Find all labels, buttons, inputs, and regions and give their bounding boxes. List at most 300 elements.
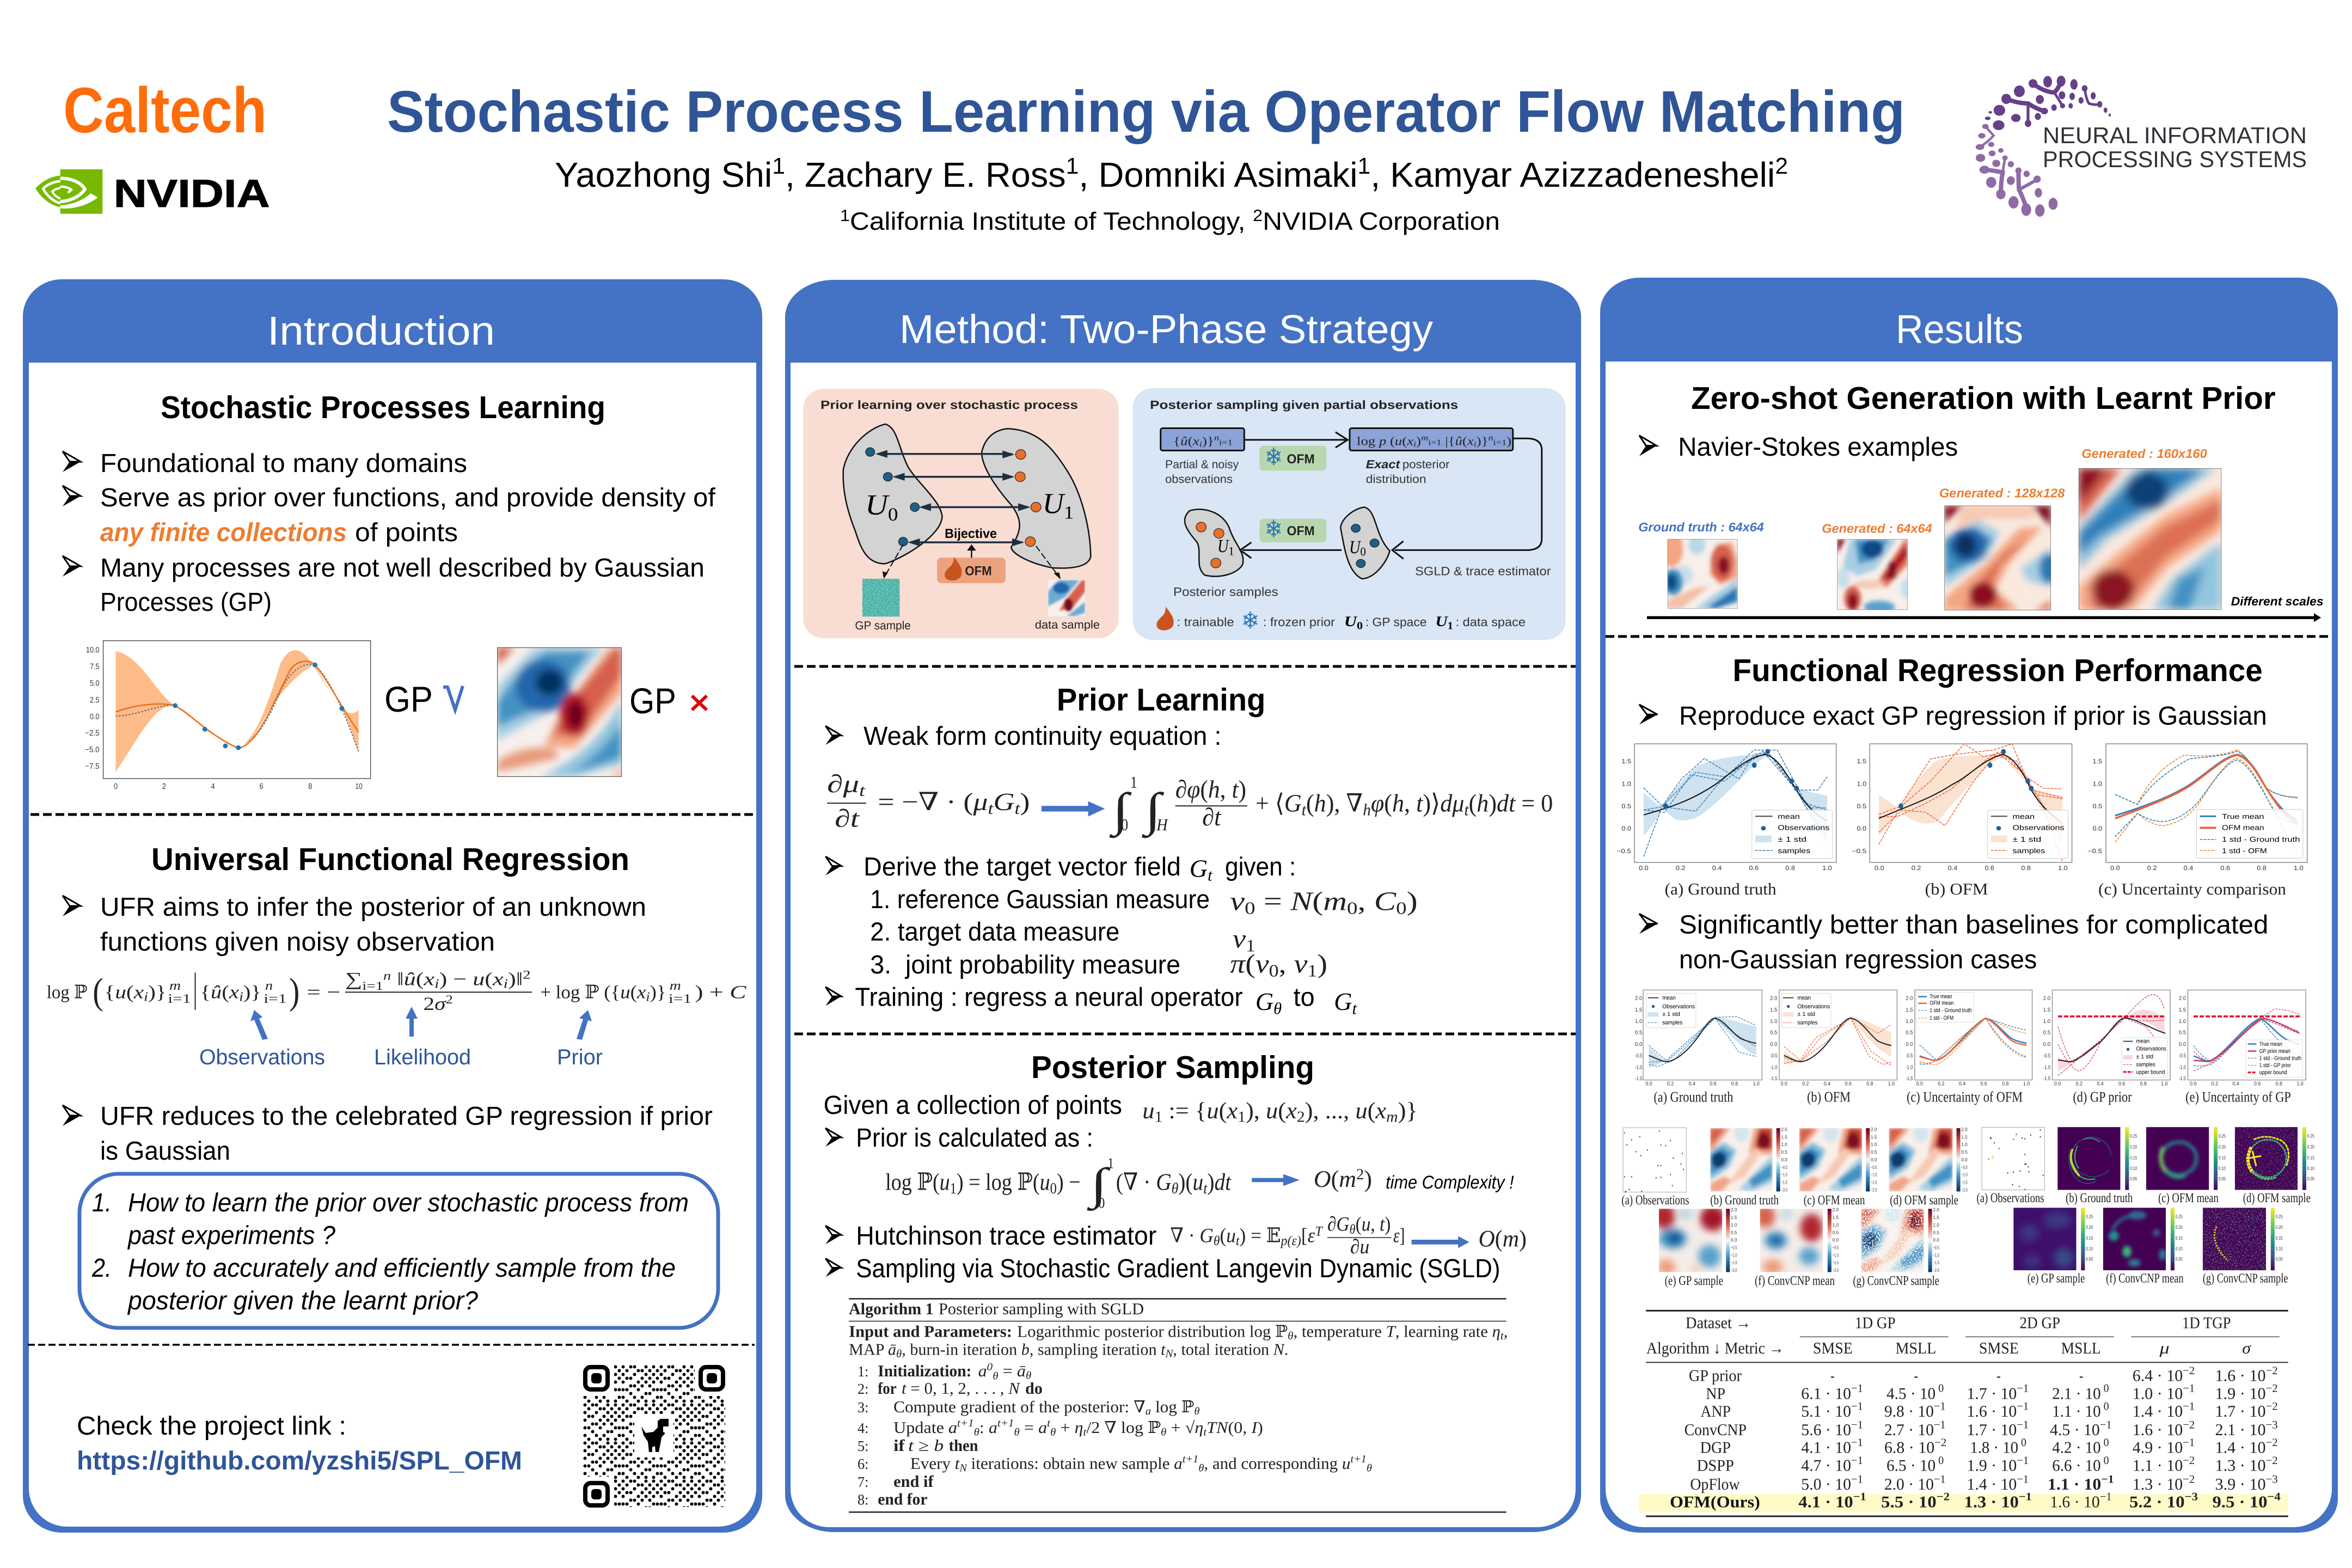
bullet: prior calculation xyxy=(825,1123,1093,1152)
heatmap: (b) ground truth RdBu xyxy=(1710,1124,1773,1191)
tick labels: five-panel plots: -1.5 xyxy=(2179,1075,2186,1081)
table: regression performance: 4.9 · 10 xyxy=(2133,1438,2258,1456)
bullet: training: t xyxy=(1352,999,1357,1018)
algorithm box: , burn-in iteration xyxy=(902,1340,1021,1358)
captions: viridis top row: (b) Ground truth xyxy=(2066,1190,2133,1205)
chart: (c) uncertainty comparison: 0.6 xyxy=(2220,865,2230,871)
equation: UFR posterior: 2 xyxy=(446,993,453,1006)
equation: continuity: h), ∇ xyxy=(1314,789,1396,817)
bullet: Hutchinson: p(ε) xyxy=(1280,1233,1301,1248)
algorithm box: Every t xyxy=(910,1454,977,1472)
figure: posterior sampling given partial observations: 0 xyxy=(1361,545,1366,559)
chart: (b) OFM GP regression: 0.8 xyxy=(2021,865,2031,871)
table: regression performance: 1.8 · 10 xyxy=(1970,1438,2095,1456)
list: measures: 3. joint probability measure xyxy=(870,950,1180,979)
bullet: UFR aim xyxy=(63,893,646,957)
colorbars: RdBu top row: 1.0 xyxy=(1871,1142,1877,1147)
chart: (b) OFM TGP: Observations xyxy=(1797,1003,1830,1009)
tick labels: five-panel plots: 2.0 xyxy=(1635,995,1642,1001)
algorithm box: θ xyxy=(1026,1369,1031,1381)
colorbars: RdBu top row: −1.0 xyxy=(1781,1172,1787,1178)
text: collection of points: ), ..., xyxy=(1305,1098,1355,1123)
table: regression performance: 9.5 · 10 xyxy=(2213,1493,2338,1511)
section: non-Gaussian regression figures: 1.0 xyxy=(1961,1142,1968,1147)
tick labels: five-panel plots: 1.5 xyxy=(2043,1007,2050,1013)
authors: Yaozhong Shi xyxy=(555,155,769,194)
tick labels: five-panel plots: -0.5 xyxy=(2043,1052,2050,1058)
table: regression performance: −3 xyxy=(2266,1473,2278,1485)
equation: continuity: ∫ xyxy=(1142,783,1165,838)
figure: posterior sampling given partial observations xyxy=(1133,388,1566,640)
table: regression performance: 3.9 · 10 xyxy=(2215,1475,2341,1493)
chart: (a) ground truth GP regression: 0.8 xyxy=(1785,865,1795,871)
list: measures: 1. reference Gaussian measure xyxy=(870,885,1210,914)
equation: UFR posterior: )} xyxy=(650,982,666,1002)
table: regression performance: OFM(Ours) xyxy=(1670,1493,1760,1511)
table: regression performance: −3 xyxy=(2185,1491,2198,1503)
table: regression performance: −1 xyxy=(2100,1418,2112,1431)
bullet: training: G xyxy=(1334,988,1367,1015)
chart: (d) GP prior: mean xyxy=(2136,1038,2149,1044)
colorbars: RdBu bottom row: 0.0 xyxy=(1731,1237,1737,1243)
section: non-Gaussian regression figures: 2.0 xyxy=(1933,1207,1939,1212)
list: measures: π(ν xyxy=(1230,948,1277,978)
colorbars: viridis top row: 0.25 xyxy=(2130,1134,2137,1139)
text: collection of points: u(x xyxy=(1206,1098,1245,1123)
callout: research questions: posterior given the learnt prior? xyxy=(127,1287,478,1315)
text: collection of points: 1 xyxy=(1238,1108,1246,1125)
table: regression performance: −1 xyxy=(2183,1436,2195,1449)
chart: (c) uncertainty of OFM: 1 std - OFM xyxy=(1930,1014,1953,1021)
tick labels: five-panel plots: -1.0 xyxy=(1906,1064,1913,1070)
chart: (a) ground truth GP regression: 0.0 xyxy=(1621,825,1631,832)
tick labels: five-panel plots: 0.8 xyxy=(1731,1081,1738,1087)
chart: (a) ground truth GP regression: 0.0 xyxy=(1639,865,1649,871)
equation: log prior: ) xyxy=(1364,1166,1372,1192)
colorbars: RdBu bottom row: 1.0 xyxy=(1731,1222,1737,1228)
table: regression performance: 6.1 · 10 xyxy=(1801,1385,1926,1402)
equation: UFR posterior: ({u(x xyxy=(604,982,646,1002)
bullet: Hutchinson: ε xyxy=(1308,1224,1315,1247)
table: regression performance: 1.9 · 10 xyxy=(1967,1456,2092,1474)
captions: five-panel plots xyxy=(1653,1089,2291,1105)
algorithm box: 8: xyxy=(857,1491,868,1508)
chart: GP regression example: 4 xyxy=(211,782,215,791)
arrow: likelihood xyxy=(406,1007,418,1037)
equation: continuity: ( xyxy=(1469,789,1477,817)
chart: GP regression example: 0 xyxy=(114,782,118,791)
chart: (c) uncertainty of OFM: OFM mean xyxy=(1930,1000,1953,1006)
colorbars: RdBu bottom row: −0.5 xyxy=(1833,1245,1839,1251)
table: regression performance: −1 xyxy=(2101,1473,2114,1485)
bullet: Hutchinson: u xyxy=(1226,1224,1236,1247)
table: regression performance: 1.6 · 10 xyxy=(2215,1367,2341,1385)
figure: posterior sampling given partial observations: SGLD & trace estimator xyxy=(1415,564,1551,578)
tick labels: five-panel plots: -1.5 xyxy=(1635,1075,1642,1081)
colorbars: RdBu top row: 2.0 xyxy=(1781,1126,1787,1132)
algorithm box: a xyxy=(978,1362,987,1380)
colorbars: RdBu top row: 1.5 xyxy=(1871,1134,1877,1140)
tick labels: five-panel plots: 2.0 xyxy=(1770,995,1777,1001)
tick labels: five-panel plots: 1.0 xyxy=(1753,1081,1760,1087)
algorithm box: 7: xyxy=(857,1473,868,1490)
list: measures: ν xyxy=(1294,948,1308,978)
logo: NeurIPS xyxy=(1976,76,2307,217)
equation: UFR posterior: ‖ xyxy=(391,969,404,989)
table: regression performance: 1.4 · 10 xyxy=(1967,1475,2092,1493)
figure: posterior sampling given partial observations: n xyxy=(1489,433,1493,442)
figure: posterior sampling given partial observations: |{û(x xyxy=(1448,434,1479,448)
colorbars: viridis bottom row: 0.25 xyxy=(2176,1214,2183,1219)
equation: UFR posterior: )} xyxy=(243,982,261,1002)
chart: (e) uncertainty of GP: GP prior mean xyxy=(2259,1048,2290,1054)
section: non-Gaussian regression figures: 1.0 xyxy=(1933,1222,1939,1228)
heatmap: generated 160x160 xyxy=(2079,468,2221,610)
bullet: Hutchinson: ( xyxy=(1356,1212,1362,1235)
algorithm box: a xyxy=(1174,1454,1183,1472)
section: non-Gaussian regression figures: −1.5 xyxy=(1961,1179,1968,1185)
section: Functional Regression Performance: (b) OFM xyxy=(1925,880,1988,898)
table: regression performance: 1.0 · 10 xyxy=(2133,1385,2258,1402)
algorithm box: 2: xyxy=(857,1380,868,1397)
captions: RdBu bottom row: (e) GP sample xyxy=(1665,1273,1723,1288)
captions: five-panel plots: (b) OFM xyxy=(1807,1089,1851,1105)
section: non-Gaussian regression figures: 0.15 xyxy=(2276,1235,2283,1241)
figure: posterior sampling given partial observations: n xyxy=(1214,433,1219,442)
chart: (a) ground truth GP regression: 0.4 xyxy=(1712,865,1722,871)
list: measures: 0 xyxy=(1396,899,1407,918)
algorithm box: θ xyxy=(1161,1426,1167,1438)
captions: five-panel plots: (d) GP prior xyxy=(2073,1089,2132,1105)
table: regression performance: ConvCNP xyxy=(1685,1421,1747,1439)
bullet: Hutchinson: ) = 𝔼 xyxy=(1240,1224,1281,1247)
list: measures: ) xyxy=(1317,948,1327,978)
colorbars: viridis bottom row: 0.20 xyxy=(2176,1224,2183,1230)
table: regression performance: OpFlow xyxy=(1690,1475,1740,1493)
algorithm box: , xyxy=(1504,1322,1508,1340)
chart: (e) uncertainty of GP: 1 std - GP prior xyxy=(2259,1062,2291,1068)
arrow: implies xyxy=(1042,801,1105,817)
bullet: Hutchinson: u, t) xyxy=(1362,1212,1396,1235)
chart: (a) ground truth TGP: ± 1 std xyxy=(1662,1010,1680,1018)
list: measures: ) xyxy=(1407,886,1418,916)
captions: five-panel plots: (a) Ground truth xyxy=(1653,1089,1733,1105)
figure: posterior sampling given partial observations: ) xyxy=(1416,434,1421,448)
tick labels: five-panel plots: 0.4 xyxy=(2097,1081,2104,1087)
colorbars: RdBu bottom row: −2.0 xyxy=(1731,1267,1737,1273)
equation: UFR posterior: û(x xyxy=(404,969,432,989)
section: non-Gaussian regression figures: 0.20 xyxy=(2276,1224,2283,1230)
captions: viridis top row: (c) OFM mean xyxy=(2158,1190,2219,1205)
equation: UFR posterior: i xyxy=(646,990,650,1004)
chart: (b) OFM GP regression: mean xyxy=(2012,812,2035,820)
algorithm box: + √ xyxy=(1167,1418,1195,1437)
colorbars: RdBu bottom row: 2.0 xyxy=(1731,1207,1737,1212)
table: regression performance: −3 xyxy=(2266,1418,2278,1431)
table: regression performance: −2 xyxy=(2183,1473,2195,1485)
table: regression performance: 0 xyxy=(1935,1454,1944,1467)
section: non-Gaussian regression figures: 0.5 xyxy=(1933,1230,1939,1235)
panel heading: Method: Method: Two-Phase Strategy xyxy=(899,307,1433,352)
equation: continuity: ) xyxy=(1020,788,1030,816)
callout: research questions xyxy=(79,1174,718,1328)
label: GP check: GP xyxy=(384,679,433,719)
algorithm box: η xyxy=(1075,1418,1083,1437)
equation: continuity: t xyxy=(1302,801,1307,819)
tick labels: five-panel plots: 0.2 xyxy=(1667,1081,1674,1087)
chart: (c) uncertainty of OFM xyxy=(1915,990,2032,1080)
bullet list: stochastic processes xyxy=(63,449,716,617)
heatmap: (e) GP sample RdBu xyxy=(1659,1209,1723,1272)
title: Stochastic Process Learning via Operator Flow Matching xyxy=(387,78,1905,144)
affiliations: 2 xyxy=(1253,207,1263,225)
colorbars: RdBu bottom row: 1.5 xyxy=(1731,1215,1737,1220)
heatmap: (d) OFM sample RdBu xyxy=(1889,1124,1952,1191)
list: measures: C xyxy=(1374,886,1396,916)
tick labels: five-panel plots: 0.2 xyxy=(1802,1081,1809,1087)
tick labels: five-panel plots: 2.0 xyxy=(2179,995,2186,1001)
bullet list: stochastic processes: of points xyxy=(355,518,458,547)
chart: (c) uncertainty comparison: 1.0 xyxy=(2294,865,2304,871)
table: regression performance: −2 xyxy=(2266,1400,2278,1412)
equation: UFR posterior: ) xyxy=(289,971,299,1012)
chart: (c) uncertainty comparison: 0.8 xyxy=(2257,865,2267,871)
section: Functional Regression Performance: (a) Ground truth xyxy=(1665,880,1777,898)
figure: posterior sampling given partial observations: : frozen prior xyxy=(1263,615,1335,629)
table: regression performance: −1 xyxy=(1851,1418,1863,1431)
section: non-Gaussian regression figures: −2.0 xyxy=(1961,1187,1968,1192)
tick labels: five-panel plots: -0.5 xyxy=(1770,1052,1777,1058)
bullet: Hutchinson: θ xyxy=(1350,1222,1356,1237)
bullet: Navier-Stokes xyxy=(1639,432,1958,461)
figure: prior learning over stochastic process: U xyxy=(1043,487,1065,519)
chart: (b) OFM GP regression xyxy=(1852,744,2072,871)
chart: (c) uncertainty comparison: 0.2 xyxy=(2147,865,2157,871)
bullet: Hutchinson: ( xyxy=(1220,1224,1226,1247)
figure: prior learning over stochastic process: GP sample xyxy=(855,619,911,632)
chart: GP regression example xyxy=(85,641,371,791)
tick labels: five-panel plots: 0.0 xyxy=(1770,1041,1777,1047)
section: non-Gaussian regression figures: 0.05 xyxy=(2276,1257,2283,1262)
algorithm box: 5: xyxy=(857,1437,868,1454)
tick labels: five-panel plots: 0.0 xyxy=(1906,1041,1913,1047)
table: regression performance: - xyxy=(2079,1367,2083,1385)
equation: continuity: = −∇ · (μ xyxy=(878,788,1026,816)
figure: posterior sampling given partial observations: ❄ xyxy=(1265,443,1283,470)
tick labels: five-panel plots: 0.2 xyxy=(1938,1081,1945,1087)
chart: GP regression example: 10.0 xyxy=(86,645,100,654)
algorithm box: then xyxy=(949,1436,978,1455)
algorithm box: t+1 xyxy=(1183,1453,1198,1465)
equation: continuity: ∂t xyxy=(835,805,860,832)
text: collection of points: Given a collection of points xyxy=(824,1090,1122,1119)
chart: (b) OFM TGP xyxy=(1779,990,1897,1080)
table: regression performance: 1D GP xyxy=(1855,1314,1896,1332)
captions: RdBu top row: (a) Observations xyxy=(1621,1192,1689,1207)
text: collection of points: ), xyxy=(1246,1098,1266,1123)
table: regression performance: −1 xyxy=(1851,1400,1863,1412)
heading: Prior Learning: Prior Learning xyxy=(1057,682,1265,718)
algorithm box xyxy=(849,1299,1508,1512)
colorbars: RdBu bottom row: −1.0 xyxy=(1833,1252,1839,1258)
table: regression performance: −1 xyxy=(2183,1400,2195,1412)
algorithm box: /2 ∇ log ℙ xyxy=(1086,1418,1161,1437)
tick labels: five-panel plots: 2.0 xyxy=(2043,995,2050,1001)
section: non-Gaussian regression figures: Observations xyxy=(2136,1045,2166,1052)
table: regression performance: ANP xyxy=(1700,1402,1731,1420)
table: regression performance: 6.5 · 10 xyxy=(1886,1456,2012,1474)
panel: Method xyxy=(785,280,1581,1532)
algorithm box: Input and Parameters: xyxy=(849,1322,1012,1340)
algorithm box: 3: xyxy=(857,1399,868,1416)
authors: 2 xyxy=(1775,153,1788,179)
tick labels: five-panel plots: 1.0 xyxy=(1888,1081,1895,1087)
section: non-Gaussian regression figures: 0.10 xyxy=(2276,1246,2283,1252)
algorithm box: T, learning rate η xyxy=(1386,1322,1549,1340)
text: collection of points: )} xyxy=(1398,1098,1418,1123)
colorbars: RdBu top row: −1.5 xyxy=(1871,1179,1877,1185)
bullet: Hutchinson: O(m) xyxy=(1478,1226,1527,1252)
algorithm box: 0 xyxy=(987,1361,993,1373)
table: regression performance: −1 xyxy=(1934,1400,1946,1412)
tick labels: five-panel plots: 0.0 xyxy=(2054,1081,2061,1087)
callout: research questions: 1. xyxy=(92,1189,112,1217)
chart: (c) uncertainty comparison: 0.0 xyxy=(2092,825,2102,832)
tick labels: five-panel plots: 0.4 xyxy=(1824,1081,1830,1087)
tick labels: five-panel plots: -0.5 xyxy=(2179,1052,2186,1058)
list: measures: 0 xyxy=(1269,961,1279,981)
captions: five-panel plots: (c) Uncertainty of OFM xyxy=(1907,1089,2023,1105)
bullet: UFR aim: functions given noisy observation xyxy=(100,928,495,957)
chart: (e) uncertainty of GP: upper bound xyxy=(2259,1069,2287,1075)
bullet list: stochastic processes: Processes (GP) xyxy=(100,588,272,617)
colorbars: viridis bottom row: 0.10 xyxy=(2086,1246,2093,1252)
table: regression performance: 1.1 · 10 xyxy=(2133,1456,2258,1474)
table: regression performance: −2 xyxy=(2266,1454,2278,1467)
table: regression performance: - xyxy=(1830,1367,1835,1385)
affiliations: NVIDIA Corporation xyxy=(1263,207,1500,235)
equation: continuity: ∂φ(h, t) xyxy=(1175,776,1246,803)
chart: (c) uncertainty comparison: 1 std - Ground truth xyxy=(2222,835,2300,843)
figure: posterior sampling given partial observations: i xyxy=(1474,439,1477,449)
bullet: Hutchinson: θ xyxy=(1214,1233,1220,1248)
table: regression performance: 6.6 · 10 xyxy=(2052,1456,2177,1474)
section: non-Gaussian regression figures: −0.5 xyxy=(1933,1245,1939,1251)
authors: 1 xyxy=(772,153,785,179)
chart: (c) uncertainty comparison: 0.5 xyxy=(2092,803,2102,810)
table: regression performance: −2 xyxy=(2266,1364,2278,1377)
table: regression performance: −1 xyxy=(1934,1418,1946,1431)
table: regression performance: 4.1 · 10 xyxy=(1801,1438,1926,1456)
tick labels: five-panel plots: 0.4 xyxy=(2232,1081,2239,1087)
chart: (c) uncertainty comparison: −0.5 xyxy=(2088,848,2102,854)
equation: log prior: θ xyxy=(1172,1180,1178,1197)
chart: (c) uncertainty comparison: OFM mean xyxy=(2222,824,2264,831)
equation: UFR posterior: ) − xyxy=(439,969,473,989)
colorbars: RdBu bottom row: −2.0 xyxy=(1833,1267,1839,1273)
figure: posterior sampling given partial observations: )} xyxy=(1202,434,1214,448)
panel heading: Introduction: Introduction xyxy=(267,308,495,353)
figure: posterior sampling given partial observations: distribution xyxy=(1366,473,1426,486)
colorbars: viridis bottom row: 0.05 xyxy=(2086,1257,2093,1262)
algorithm box: t xyxy=(1083,1426,1087,1438)
chart: GP regression example: 7.5 xyxy=(90,662,100,671)
figure: prior learning over stochastic process: data sample xyxy=(1035,618,1100,631)
colorbars: RdBu top row: −2.0 xyxy=(1781,1187,1787,1192)
algorithm box: 1: xyxy=(857,1363,868,1380)
colorbars: viridis top row: 0.05 xyxy=(2219,1176,2226,1181)
chart: (a) ground truth GP regression xyxy=(1617,744,1836,871)
section: non-Gaussian regression figures: 1.0 xyxy=(2296,1081,2304,1087)
text: 0.20 xyxy=(2307,1144,2314,1149)
table: regression performance: 2.1 · 10 xyxy=(2052,1385,2177,1402)
bullet: target vector field: t xyxy=(1208,866,1212,884)
algorithm box: Compute gradient of the posterior: ∇ xyxy=(893,1398,1306,1416)
tick labels: five-panel plots: 1.0 xyxy=(2043,1019,2050,1025)
tick labels: five-panel plots xyxy=(1635,995,2304,1087)
algorithm box: η xyxy=(1195,1418,1203,1437)
callout: research questions: 2. xyxy=(91,1254,112,1283)
chart: GP regression example: 6 xyxy=(259,782,264,791)
colorbars: viridis top row: 0.10 xyxy=(2130,1166,2137,1171)
table: regression performance: 2.7 · 10 xyxy=(1884,1421,2010,1439)
figure: posterior sampling given partial observations: i=1 xyxy=(1219,438,1233,447)
table: regression performance: −1 xyxy=(1851,1436,1863,1449)
label: generated 128: Generated : 128x128 xyxy=(1939,486,2065,500)
algorithm box: , and corresponding xyxy=(1204,1454,1342,1472)
equation: log prior: u xyxy=(1193,1169,1203,1195)
figure: posterior sampling given partial observations: OFM xyxy=(1287,452,1315,467)
bullet list: stochastic processes: any finite collections xyxy=(100,518,347,547)
algorithm box: u xyxy=(1342,1454,1350,1472)
bullet: Hutchinson: ∇ · G xyxy=(1170,1224,1224,1247)
tick labels: five-panel plots: 1.0 xyxy=(2023,1081,2030,1087)
figure: posterior sampling given partial observations: : GP space xyxy=(1365,615,1427,629)
tick labels: five-panel plots: 0.0 xyxy=(2190,1081,2196,1087)
equation: UFR posterior xyxy=(47,968,747,1014)
algorithm box: θ xyxy=(1194,1405,1199,1417)
figure: posterior sampling given partial observations: Posterior sampling given partial observations xyxy=(1150,399,1458,412)
table: regression performance: −2 xyxy=(1937,1491,1950,1503)
colorbars: RdBu top row xyxy=(1777,1126,1968,1192)
equation: continuity: ∫ xyxy=(1110,783,1132,838)
list: measures: 1 xyxy=(1246,936,1255,955)
bullet: Hutchinson xyxy=(825,1212,1527,1258)
tick labels: five-panel plots: 0.6 xyxy=(2254,1081,2261,1087)
figure: posterior sampling given partial observations: i=1 xyxy=(1493,438,1506,447)
tick labels: five-panel plots: -1.5 xyxy=(2043,1075,2050,1081)
label: GP check xyxy=(384,679,463,719)
table: regression performance: 2.1 · 10 xyxy=(2215,1421,2341,1439)
table: regression performance: −1 xyxy=(2017,1400,2029,1412)
table: regression performance: −1 xyxy=(2017,1454,2029,1467)
equation: UFR posterior: i=1 xyxy=(669,991,691,1006)
authors: , Domniki Asimaki xyxy=(1079,155,1358,194)
section: non-Gaussian regression figures: 1.5 xyxy=(1933,1215,1939,1220)
section: Functional Regression Performance xyxy=(1617,653,2307,974)
text: collection of points: m xyxy=(1386,1108,1398,1125)
table: regression performance: MSLL xyxy=(2061,1339,2101,1357)
colorbars: viridis top row: 0.20 xyxy=(2130,1144,2137,1149)
algorithm box: t+1 xyxy=(1350,1453,1367,1465)
colorbars: RdBu bottom row: −0.5 xyxy=(1731,1245,1737,1251)
chart: (b) OFM GP regression: 0.2 xyxy=(1912,865,1921,871)
callout: research questions: How to accurately and efficiently sample from the xyxy=(128,1254,676,1283)
algorithm box: MAP ā xyxy=(849,1340,908,1358)
chart: (a) ground truth GP regression: 0.2 xyxy=(1676,865,1685,871)
heatmap: (g) ConvCNP sample RdBu xyxy=(1861,1209,1924,1272)
chart: (c) uncertainty of OFM: True mean xyxy=(1930,993,1952,1000)
